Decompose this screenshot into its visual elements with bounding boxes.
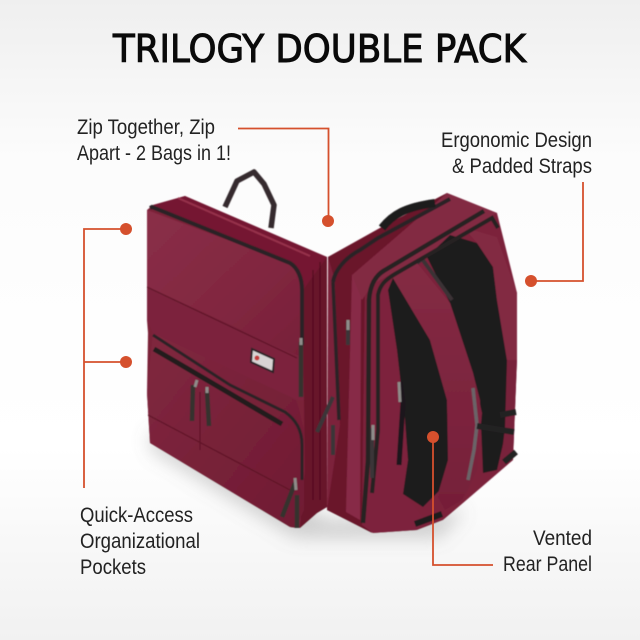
title: TRILOGY DOUBLE PACK <box>112 27 528 72</box>
left bag top handle <box>225 172 274 228</box>
callout: ergonomic design: Ergonomic Design <box>441 129 592 152</box>
side straps and buckles <box>477 412 516 462</box>
rear black mesh right <box>427 235 507 473</box>
top gusset <box>153 196 327 290</box>
callout: quick-access pockets: Pockets <box>80 556 146 579</box>
side gusset <box>300 257 327 528</box>
upper panel <box>147 210 301 357</box>
callout: ergonomic design: & Padded Straps <box>452 155 592 178</box>
callout: zip together <box>77 116 334 227</box>
callout: ergonomic design <box>441 129 592 287</box>
rear black mesh left <box>388 278 449 507</box>
logo patch <box>251 349 274 372</box>
right zipper pulls <box>317 322 372 478</box>
side strip <box>327 193 447 533</box>
callout: quick-access pockets: Quick-Access <box>80 504 193 527</box>
callout: vented rear panel: Vented <box>533 527 592 550</box>
bottom strap <box>415 514 442 524</box>
zipper pulls <box>192 342 301 528</box>
callout: vented rear panel: Rear Panel <box>503 553 592 576</box>
lower pocket <box>147 333 304 528</box>
right bag <box>317 193 517 533</box>
callout: quick-access pockets <box>80 223 200 579</box>
callout: zip together: Zip Together, Zip <box>77 116 215 139</box>
callout: zip together: Apart - 2 Bags in 1! <box>77 142 231 165</box>
shoulder strap <box>393 263 482 510</box>
fold band <box>147 287 304 400</box>
callout: vented rear panel <box>427 431 592 576</box>
backpack illustration <box>147 172 517 538</box>
right bag piping and zippers <box>333 199 450 282</box>
callout: quick-access pockets: Organizational <box>80 530 200 553</box>
left bag <box>147 196 327 528</box>
carry handle <box>382 203 435 228</box>
rear maroon panel <box>362 280 425 533</box>
